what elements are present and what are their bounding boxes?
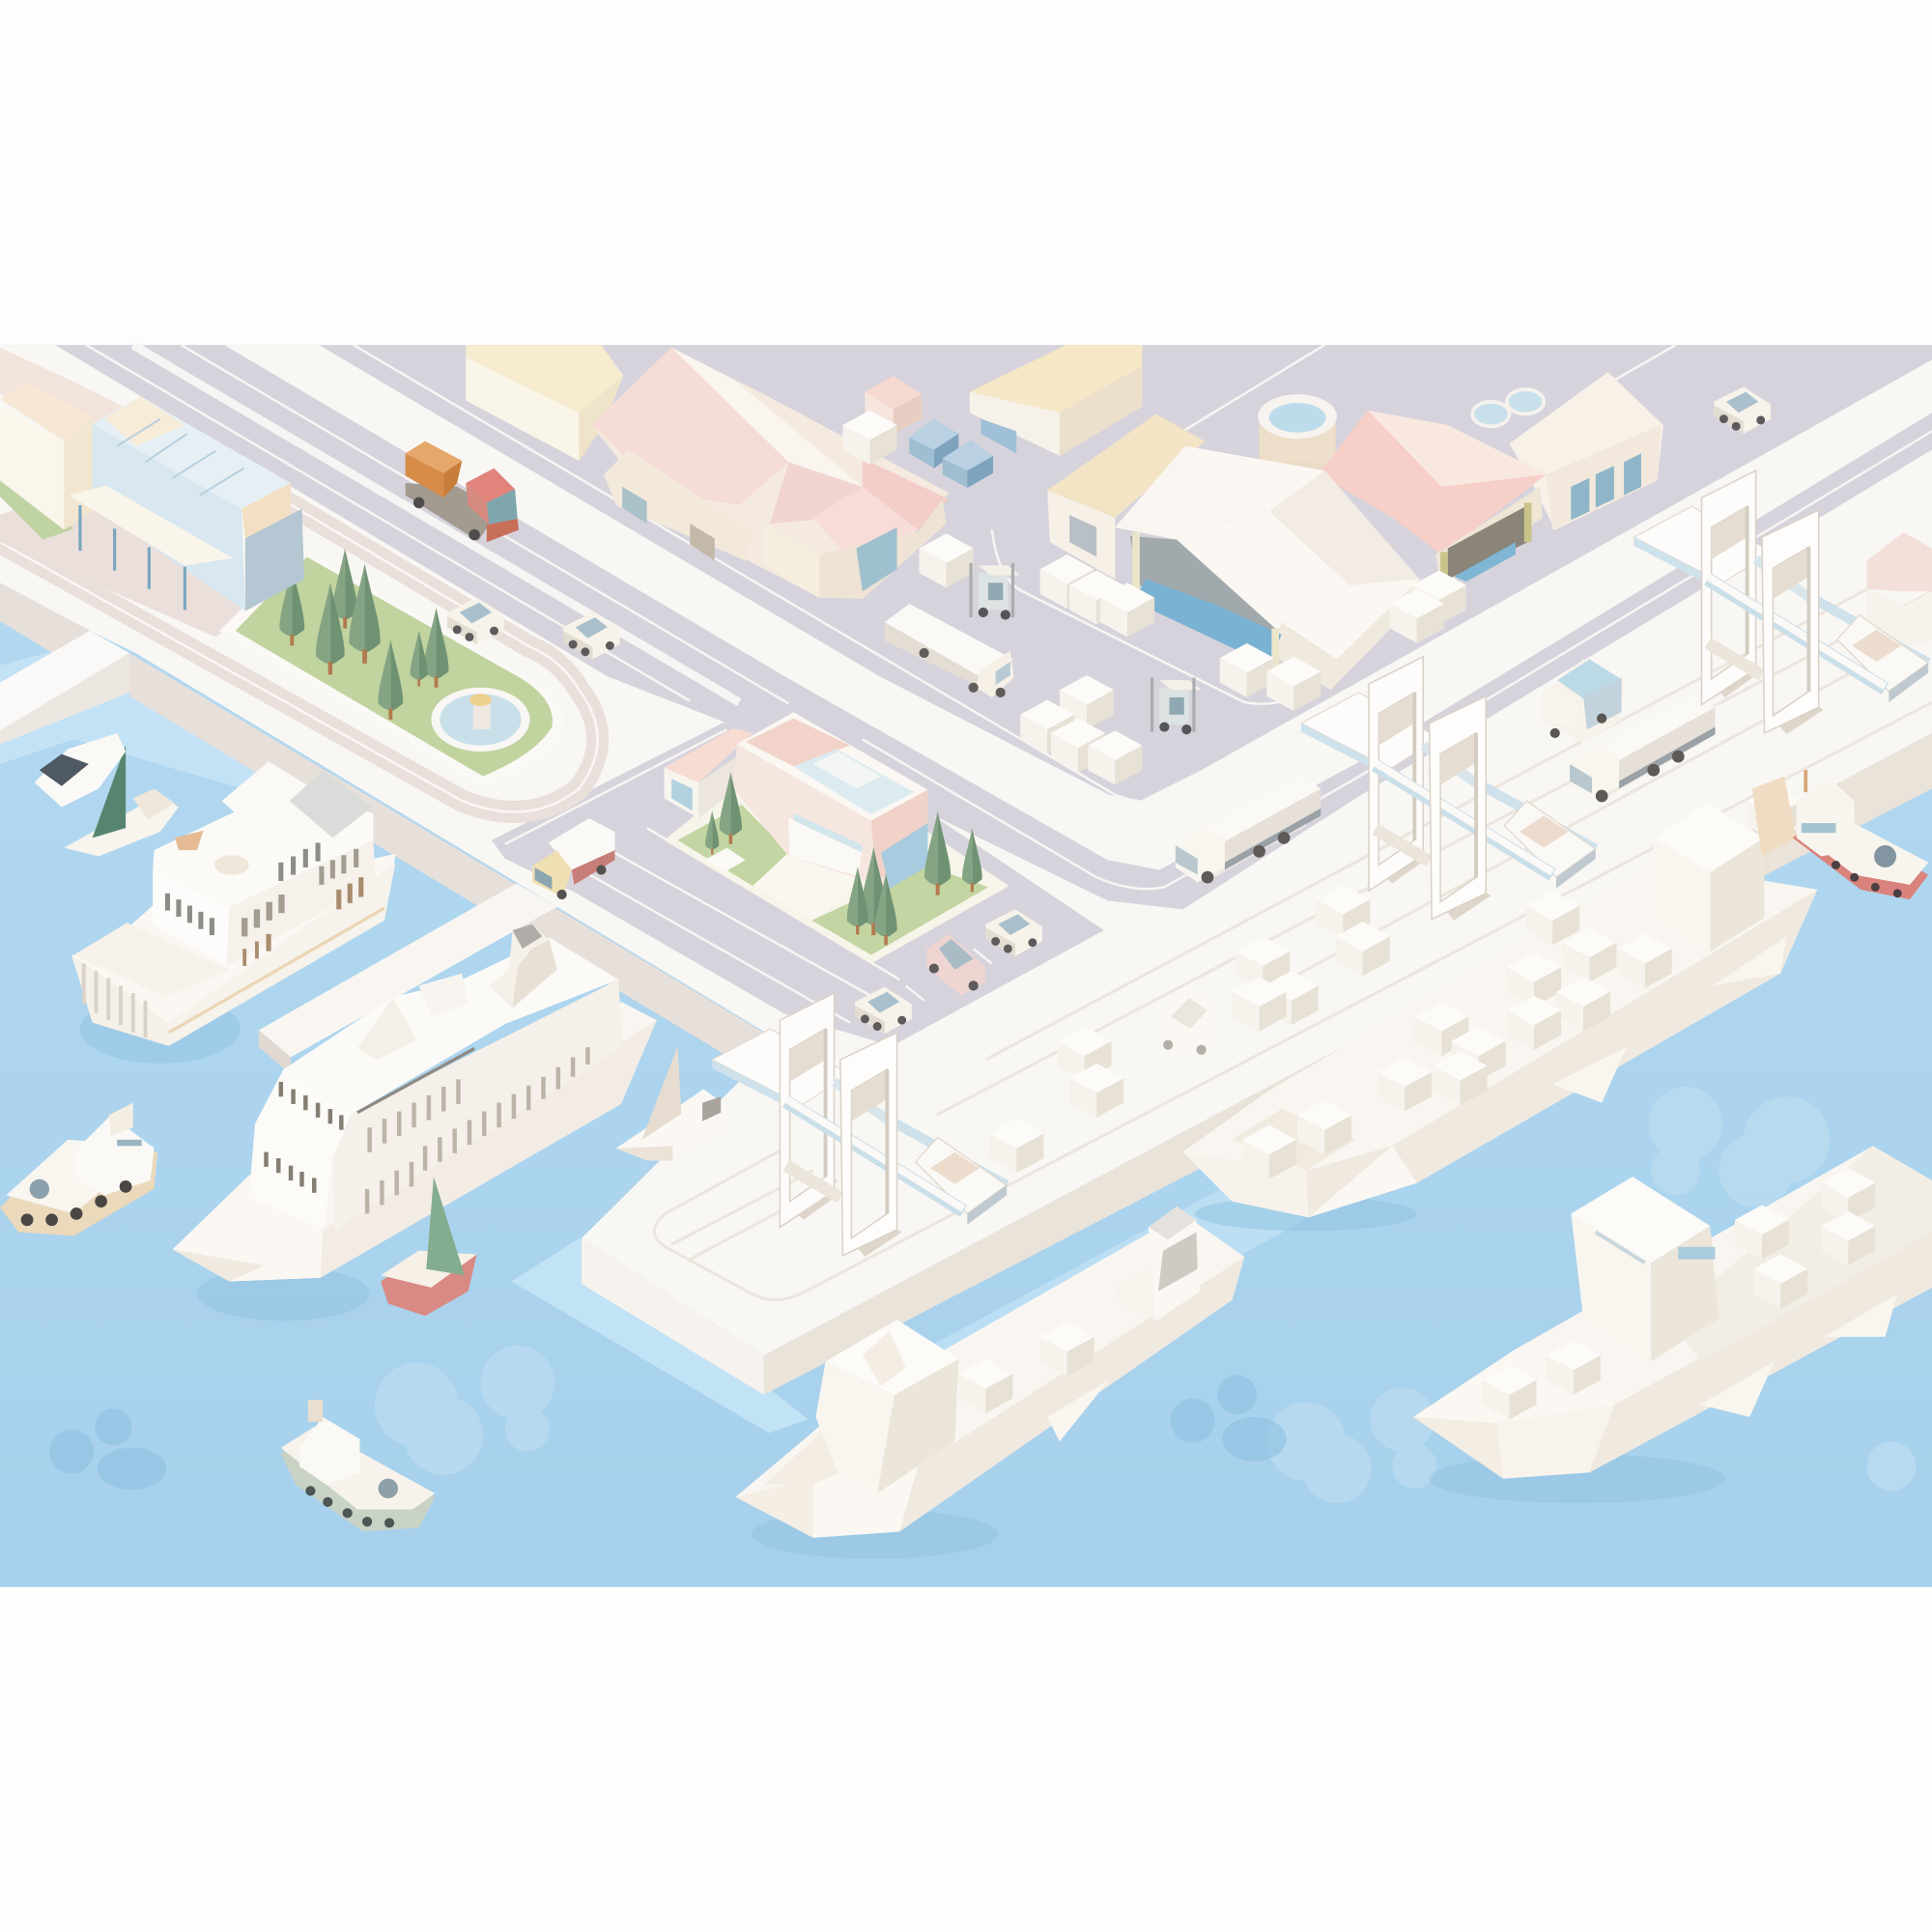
pink forecourt — [0, 487, 246, 637]
twin tanks — [1472, 389, 1544, 426]
crate piles in yard — [920, 533, 1466, 784]
warehouse: cream long roof — [466, 345, 623, 461]
cars on roads — [447, 387, 1771, 1034]
upper-left quay wall — [0, 582, 90, 654]
cruise ship — [173, 924, 657, 1282]
wharf side walls — [129, 653, 1932, 1395]
warehouse: pink roof — [591, 348, 949, 599]
cargo ship bottom right — [1413, 1146, 1932, 1479]
wharf trucks — [1176, 659, 1716, 884]
rear bridge — [1571, 1177, 1719, 1361]
cargo ship bridge — [1654, 777, 1802, 952]
ferry superstructure — [153, 761, 376, 966]
pink car — [926, 934, 985, 996]
park — [219, 549, 565, 786]
ferry pier — [259, 884, 557, 1074]
orange and red truck — [406, 441, 519, 542]
front windows — [267, 1082, 341, 1193]
wharf grooves — [654, 554, 1932, 1300]
cream warehouse top — [970, 345, 1142, 456]
forklifts — [971, 563, 1202, 734]
ferry — [71, 761, 395, 1046]
wharf cart — [1158, 985, 1217, 1055]
land — [0, 345, 1932, 1395]
left pier — [0, 631, 129, 744]
station buildings — [0, 348, 304, 611]
funnel — [1115, 1207, 1202, 1321]
green sail boat centre — [381, 1177, 477, 1316]
small office and trees — [665, 712, 1009, 963]
water — [0, 345, 1932, 1587]
right shed — [1509, 372, 1663, 529]
tug bottom — [281, 1400, 435, 1531]
left shed — [1047, 414, 1205, 579]
fountain — [431, 688, 529, 752]
road markings — [86, 345, 1932, 1023]
cargo ship bottom middle — [735, 1207, 1244, 1538]
park trees — [279, 549, 448, 720]
office trees — [705, 772, 982, 945]
main hangar group — [1047, 372, 1663, 690]
pink office building — [733, 712, 927, 889]
dark motorboat — [35, 733, 126, 807]
small sailboat near dock — [616, 1046, 729, 1161]
stacked containers at right edge — [1866, 532, 1932, 647]
side windows — [367, 1047, 587, 1213]
wharf crates and vehicle — [989, 885, 1390, 1173]
blue containers and cream crates — [842, 376, 993, 488]
lavender roads — [55, 345, 1932, 1046]
green sail boat top left — [64, 746, 179, 856]
yellow and blue delivery van — [532, 818, 614, 899]
tug left — [0, 1103, 157, 1236]
round silo — [1258, 394, 1337, 496]
red tug top right — [1793, 770, 1928, 899]
pink hall — [1319, 411, 1547, 589]
cargo ship at wharf — [1182, 777, 1817, 1217]
forward bridge — [815, 1320, 958, 1493]
big white roof hangar — [1115, 446, 1427, 690]
small pink annex — [665, 728, 753, 818]
pink walkway around park — [0, 419, 598, 812]
gantry cranes — [712, 470, 1928, 1257]
white truck in yard — [885, 604, 1014, 697]
funnel — [489, 924, 557, 1008]
cruise superstructure — [249, 924, 622, 1233]
